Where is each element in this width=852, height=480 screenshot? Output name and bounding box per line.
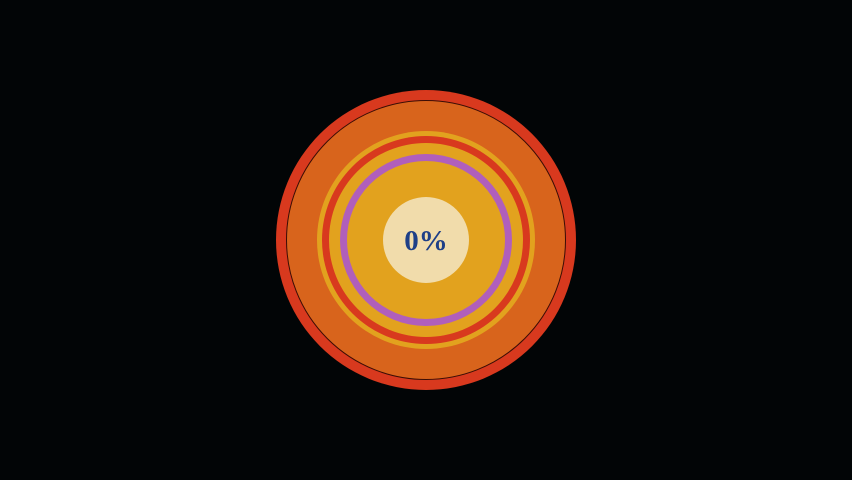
center circle with percentage	[383, 197, 469, 283]
ring: inner bands	[317, 131, 535, 349]
ring: outer red	[276, 90, 576, 390]
center circle with percentage: 0%	[404, 225, 448, 257]
